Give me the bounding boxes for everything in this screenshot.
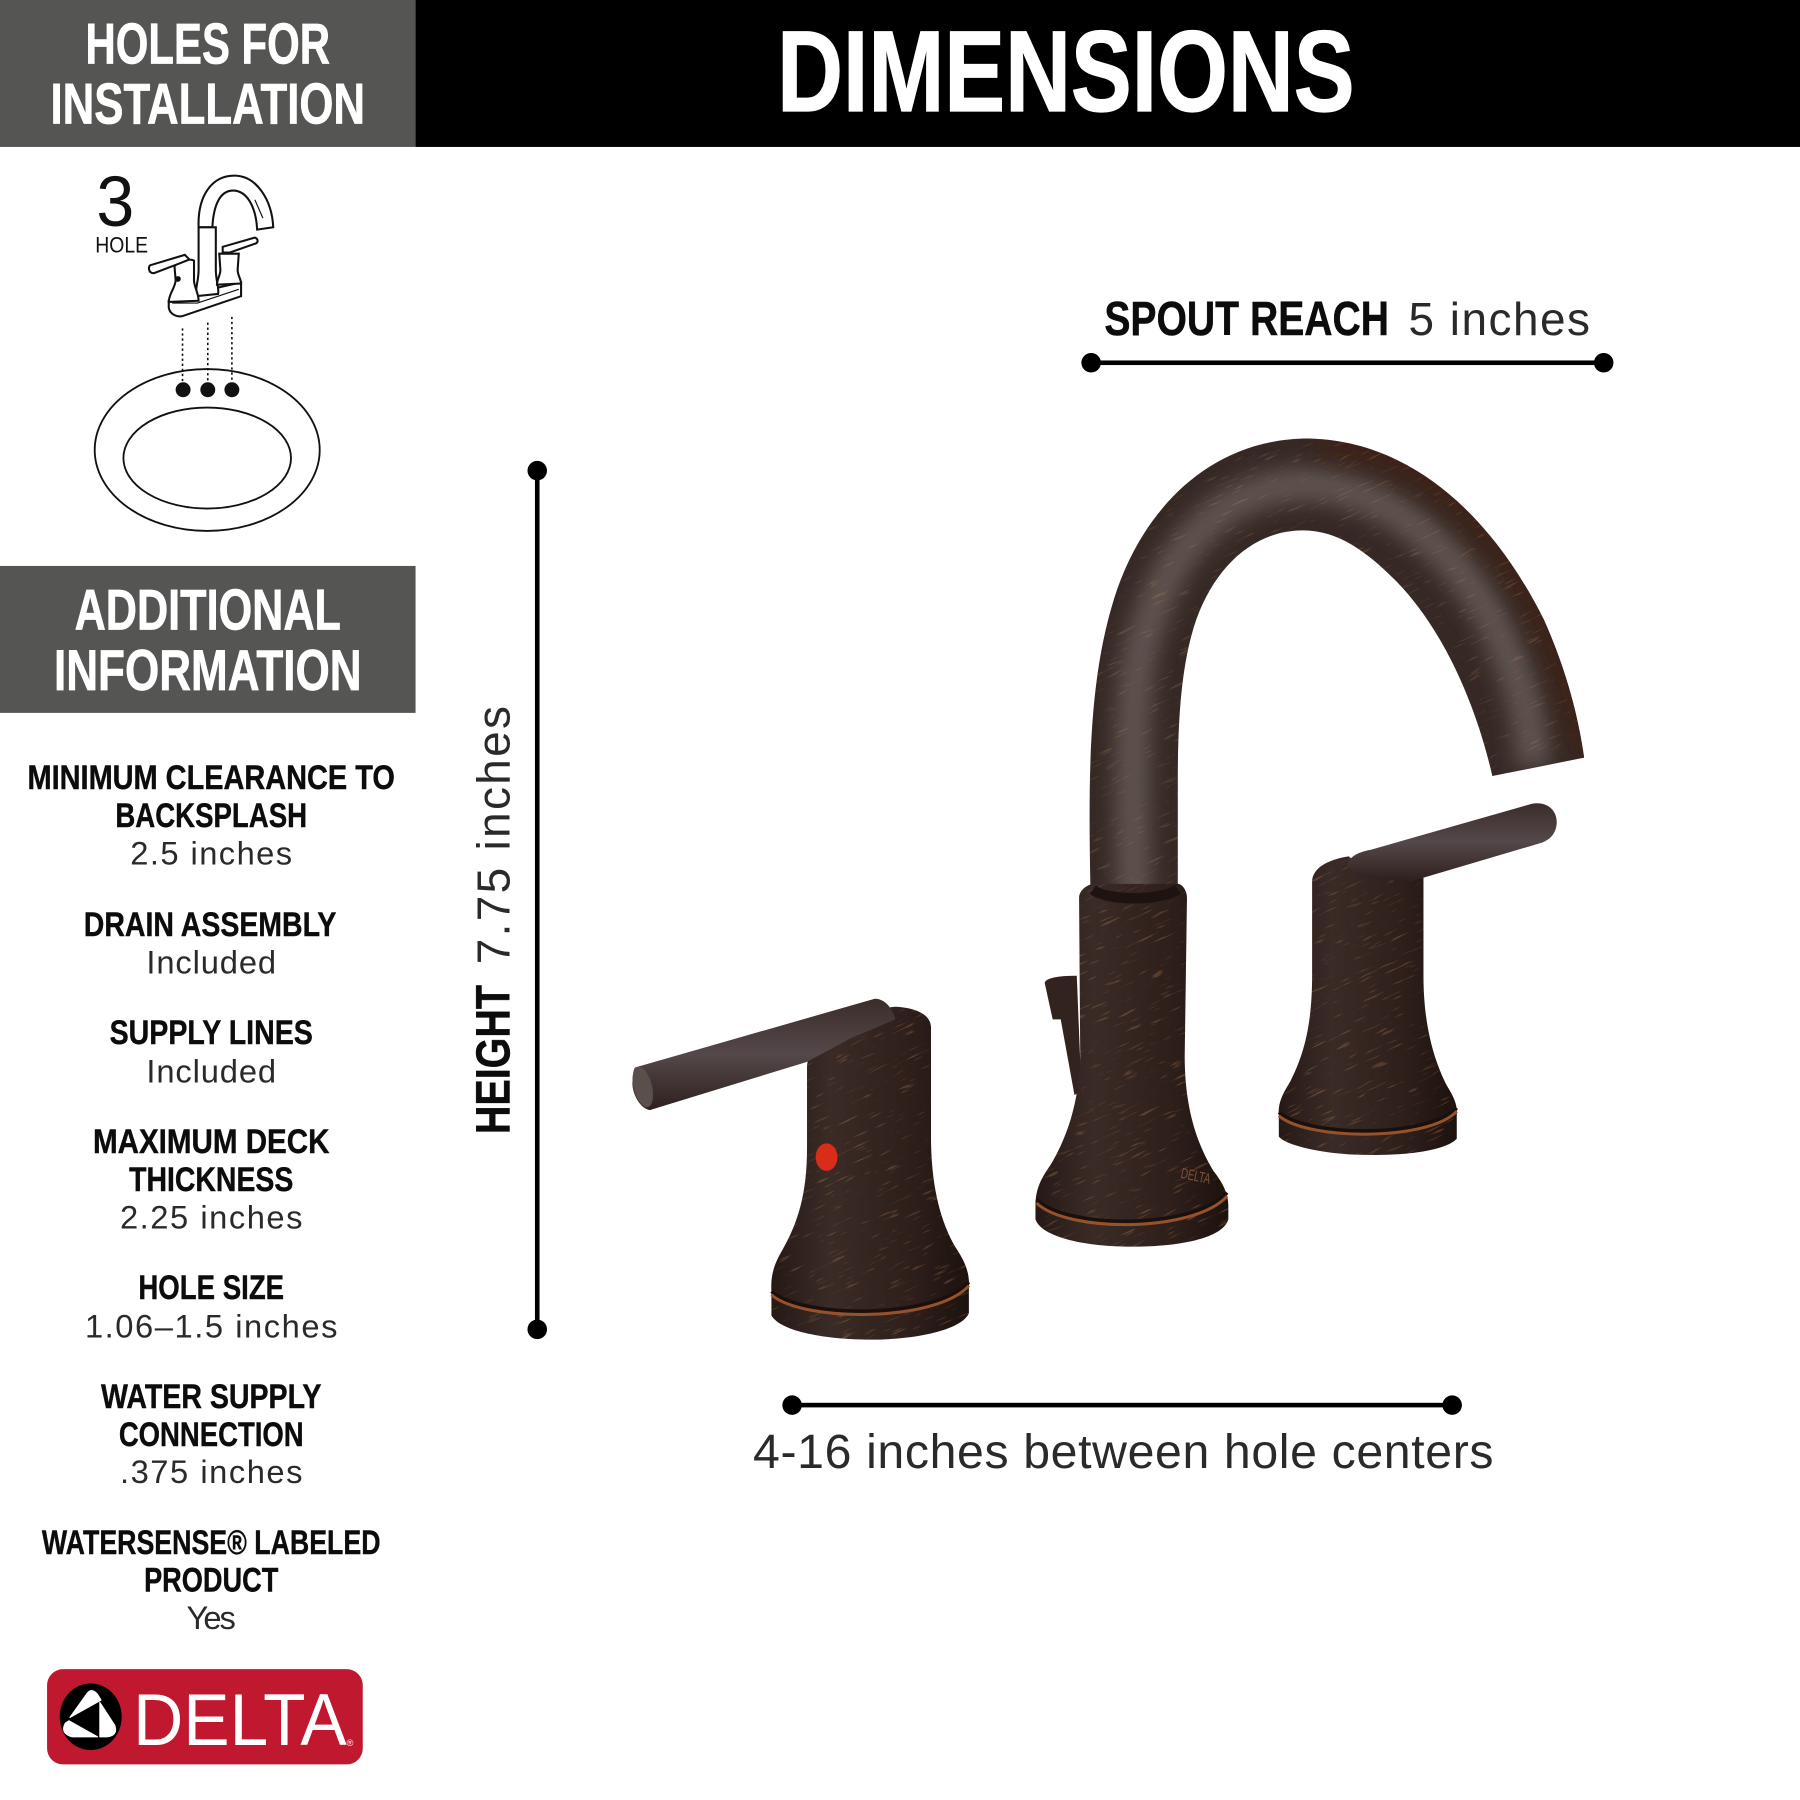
patina texture bbox=[772, 858, 1456, 1340]
dimension: height: 7.75 inches bbox=[468, 706, 520, 964]
spec: maximum deck thickness bbox=[93, 1123, 330, 1235]
spec: minimum clearance bbox=[28, 759, 395, 871]
spec: watersense bbox=[42, 1524, 381, 1636]
dimension: spout reach bbox=[1081, 292, 1613, 373]
copper rims bbox=[771, 1111, 1457, 1315]
spec: watersense: Yes bbox=[187, 1599, 236, 1636]
rim grooves bbox=[771, 1108, 1457, 1311]
spec: supply lines: Included bbox=[146, 1053, 276, 1090]
spec: drain assembly: Included bbox=[146, 943, 276, 980]
engraved logo on base: DELTA bbox=[1179, 1165, 1212, 1188]
header: additional information: INFORMATION bbox=[54, 639, 362, 703]
title: dimensions: DIMENSIONS bbox=[777, 8, 1355, 136]
header: additional information: ADDITIONAL bbox=[75, 579, 341, 643]
dotted guide lines bbox=[183, 317, 232, 381]
spec: supply lines bbox=[110, 1014, 313, 1090]
spec: minimum clearance: MINIMUM CLEARANCE TO bbox=[28, 759, 395, 797]
spec: water supply connection: WATER SUPPLY bbox=[101, 1378, 321, 1416]
spec: drain assembly bbox=[84, 906, 336, 980]
hole centers arrow bbox=[782, 1395, 1462, 1415]
dimension: height bbox=[467, 461, 547, 1339]
spec: minimum clearance: 2.5 inches bbox=[130, 834, 292, 871]
title: dimensions bbox=[416, 0, 1800, 147]
right handle body bbox=[1279, 856, 1457, 1155]
spec: watersense: WATERSENSE® LABELED bbox=[42, 1524, 381, 1562]
spout bbox=[1090, 438, 1584, 884]
drain lift rod bbox=[1045, 976, 1081, 1095]
faucet body and handle bases bbox=[771, 856, 1457, 1340]
spec: minimum clearance: BACKSPLASH bbox=[115, 797, 307, 835]
header: holes for installation: INSTALLATION bbox=[51, 72, 365, 136]
right lever bbox=[1347, 803, 1557, 881]
spec: maximum deck thickness: THICKNESS bbox=[129, 1161, 293, 1199]
dimension: height: HEIGHT bbox=[467, 985, 521, 1134]
left handle body bbox=[771, 1007, 969, 1340]
faucet photo bbox=[632, 438, 1584, 1340]
spec: water supply connection: .375 inches bbox=[120, 1453, 302, 1490]
mini faucet line drawing bbox=[149, 176, 273, 316]
header: holes for installation bbox=[0, 0, 416, 147]
icon: delta triangle mark bbox=[60, 1683, 122, 1750]
spec: drain assembly: DRAIN ASSEMBLY bbox=[84, 906, 336, 944]
spec: hole size: HOLE SIZE bbox=[138, 1269, 284, 1307]
dimension: hole centers bbox=[753, 1395, 1493, 1479]
hot indicator bbox=[816, 1143, 837, 1171]
height arrow bbox=[527, 461, 547, 1339]
label: 3 hole: HOLE bbox=[95, 233, 148, 258]
icon: three hole sink diagram bbox=[95, 163, 320, 531]
dimension: hole centers: 4-16 inches between hole centers bbox=[753, 1425, 1493, 1479]
spec: hole size bbox=[85, 1269, 338, 1344]
spec: water supply connection bbox=[101, 1378, 321, 1490]
logo: delta: ® bbox=[347, 1738, 354, 1748]
sink outline bbox=[95, 369, 320, 531]
spec: hole size: 1.06–1.5 inches bbox=[85, 1307, 337, 1344]
label: 3 hole: 3 bbox=[96, 163, 134, 242]
spout reach arrow bbox=[1081, 353, 1613, 373]
dimension: spout reach: 5 inches bbox=[1409, 293, 1590, 345]
spec: watersense: PRODUCT bbox=[144, 1562, 278, 1600]
spec: maximum deck thickness: 2.25 inches bbox=[120, 1198, 302, 1235]
logo: delta bbox=[47, 1669, 363, 1764]
header: additional information bbox=[0, 566, 416, 713]
dimension: spout reach: SPOUT REACH bbox=[1104, 292, 1389, 346]
sink holes bbox=[176, 382, 239, 397]
spec: maximum deck thickness: MAXIMUM DECK bbox=[93, 1123, 330, 1161]
spec: supply lines: SUPPLY LINES bbox=[110, 1014, 313, 1052]
left lever bbox=[629, 999, 895, 1110]
spec: water supply connection: CONNECTION bbox=[119, 1416, 304, 1454]
center body bbox=[1035, 884, 1228, 1247]
logo: delta: DELTA bbox=[133, 1678, 347, 1761]
base rims bbox=[771, 1108, 1457, 1315]
label: 3 hole bbox=[95, 163, 148, 258]
header: holes for installation: HOLES FOR bbox=[86, 13, 330, 77]
